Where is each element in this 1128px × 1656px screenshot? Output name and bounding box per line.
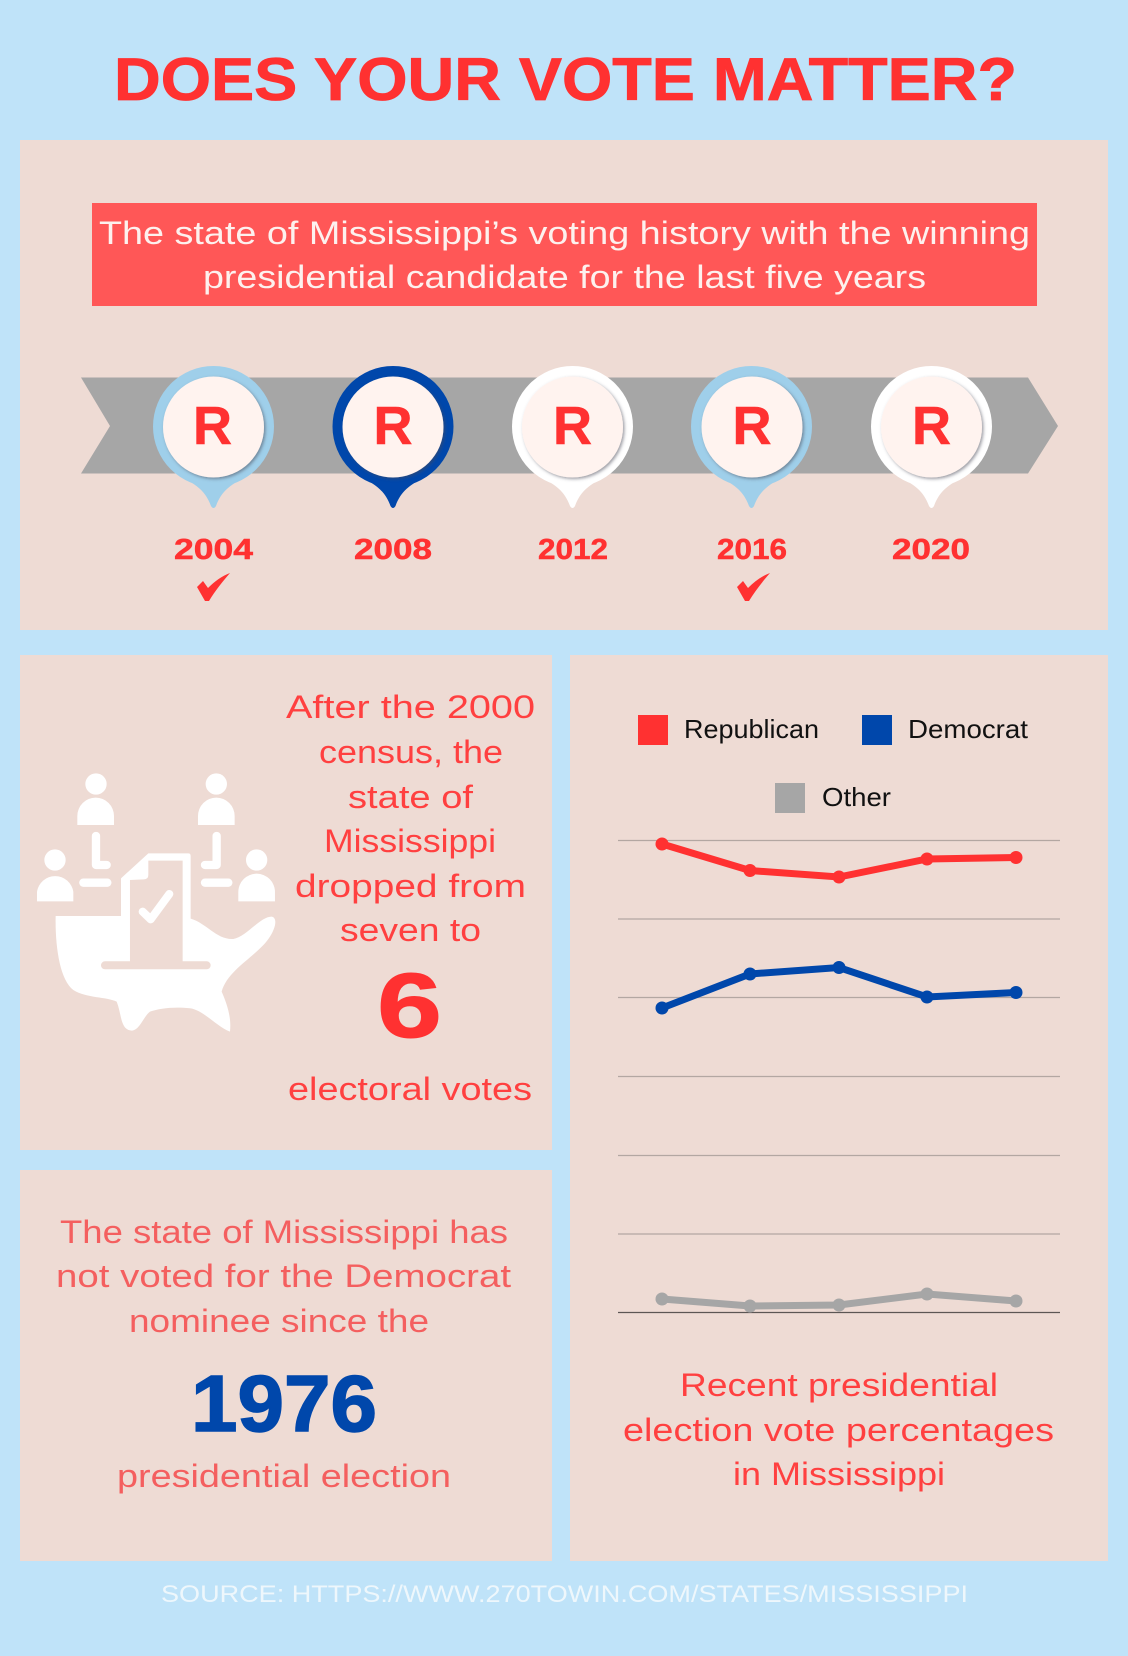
icon: check mark 2016 bbox=[737, 573, 770, 601]
pin: 2016 bbox=[691, 366, 812, 508]
banner: timeline heading bbox=[92, 203, 1037, 306]
text: census statement bbox=[286, 689, 535, 948]
chart caption: Recent presidential bbox=[680, 1367, 998, 1403]
text: Democrat statement: not voted for the Democrat bbox=[56, 1258, 511, 1294]
pin: 2012 bbox=[512, 366, 633, 508]
legend bbox=[638, 714, 1029, 813]
chart caption bbox=[623, 1367, 1054, 1492]
year labels bbox=[174, 534, 970, 566]
text: census statement: Mississippi bbox=[324, 823, 496, 859]
series: Other bbox=[656, 1288, 1022, 1312]
series: Republican bbox=[656, 838, 1022, 884]
text: Democrat statement bbox=[56, 1214, 511, 1339]
legend: Other bbox=[822, 782, 891, 812]
pin: 2004: R bbox=[193, 396, 232, 456]
title: DOES YOUR VOTE MATTER? bbox=[114, 46, 1017, 113]
pin: 2008: R bbox=[374, 396, 412, 456]
pin: 2016: R bbox=[732, 396, 772, 456]
pin: 2020: R bbox=[912, 396, 951, 456]
line chart bbox=[618, 838, 1060, 1312]
panel: electoral votes bbox=[20, 655, 552, 1150]
chart caption: election vote percentages bbox=[623, 1412, 1054, 1448]
text: electoral votes: electoral votes bbox=[288, 1071, 532, 1107]
text: Democrat statement: The state of Mississippi has bbox=[60, 1214, 508, 1250]
year labels: 2020 bbox=[892, 534, 970, 566]
big number: 1976: 1976 bbox=[191, 1359, 377, 1448]
text: census statement: dropped from bbox=[295, 868, 526, 904]
year labels: 2012 bbox=[538, 534, 608, 566]
panel: last Democrat vote bbox=[20, 1170, 552, 1561]
series: Democrat bbox=[656, 961, 1022, 1014]
text: presidential election: presidential election bbox=[117, 1458, 451, 1494]
pin: 2020 bbox=[871, 366, 992, 508]
source line: SOURCE: HTTPS://WWW.270TOWIN.COM/STATES/MISSISSIPPI bbox=[161, 1581, 968, 1608]
banner: timeline heading: The state of Mississippi’s voting history with the winning bbox=[99, 215, 1030, 251]
big number: 6: 6 bbox=[377, 955, 442, 1057]
ribbon arrow bbox=[81, 378, 1058, 474]
icon: voters around ballot and US map bbox=[37, 773, 275, 1032]
panel: vote percentage chart bbox=[570, 655, 1108, 1561]
text: census statement: state of bbox=[348, 779, 473, 815]
pin: 2008 bbox=[332, 366, 454, 508]
text: census statement: census, the bbox=[319, 734, 503, 770]
panel: voting history timeline bbox=[20, 140, 1108, 630]
pin: 2012: R bbox=[553, 396, 592, 456]
text: census statement: After the 2000 bbox=[286, 689, 535, 725]
pin: 2004 bbox=[153, 366, 274, 508]
text: census statement: seven to bbox=[340, 912, 481, 948]
legend: Democrat bbox=[908, 714, 1029, 744]
banner: timeline heading: presidential candidate for the last five years bbox=[203, 259, 926, 295]
year labels: 2004 bbox=[174, 534, 253, 566]
legend: Republican bbox=[684, 714, 819, 744]
year labels: 2008 bbox=[354, 534, 432, 566]
year labels: 2016 bbox=[717, 534, 787, 566]
text: Democrat statement: nominee since the bbox=[129, 1303, 429, 1339]
icon: check mark 2004 bbox=[197, 573, 230, 601]
chart caption: in Mississippi bbox=[733, 1456, 945, 1492]
